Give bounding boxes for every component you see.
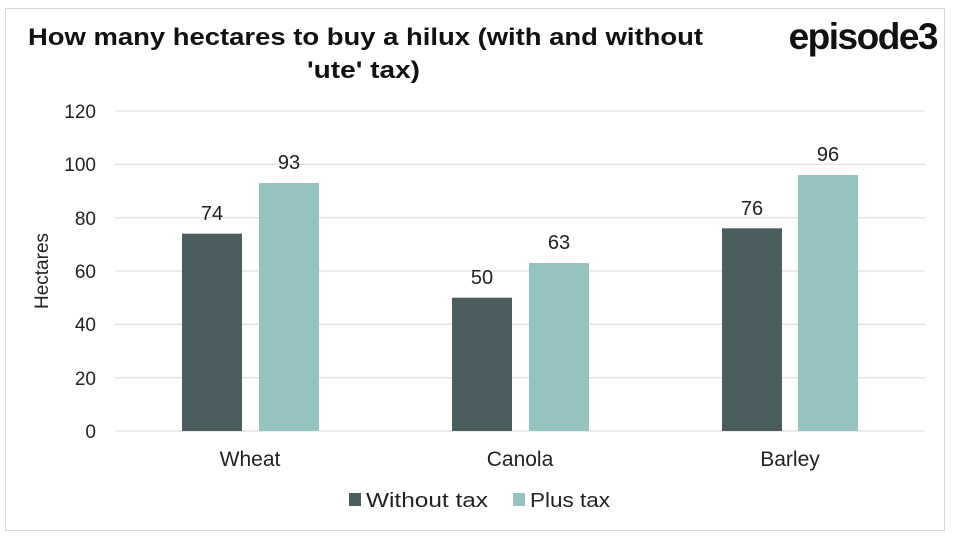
group: Barley: 96: [817, 144, 839, 166]
group: Wheat: 93: [278, 152, 300, 174]
title: 'ute' tax): [307, 57, 420, 84]
y axis labels: 100: [64, 155, 96, 176]
group: Canola: Canola: [487, 448, 554, 471]
legend: Plus tax: [530, 490, 610, 512]
y axis title: Hectares: [32, 233, 53, 309]
title: How many hectares to buy a hilux (with and without: [28, 24, 703, 51]
legend: Without tax: [366, 490, 488, 512]
y axis labels: 20: [75, 369, 96, 390]
bar chart: [182, 144, 858, 471]
legend: [349, 490, 610, 512]
y axis labels: 120: [64, 102, 96, 123]
y axis labels: 0: [85, 422, 96, 443]
y axis labels: 40: [75, 315, 96, 336]
title: [28, 24, 703, 84]
group: Canola: [452, 232, 589, 471]
group: Barley: [722, 144, 858, 471]
group: Barley: 76: [741, 198, 763, 220]
group: Wheat: [182, 152, 319, 471]
group: Wheat: Wheat: [220, 448, 281, 471]
y axis labels: 80: [75, 209, 96, 230]
group: Barley: Barley: [760, 448, 820, 471]
group: Wheat: 74: [201, 203, 223, 225]
y axis labels: 60: [75, 262, 96, 283]
group: Canola: 63: [548, 232, 570, 254]
logo: episode3: episode3: [789, 16, 938, 57]
y axis labels: [64, 102, 96, 443]
group: Canola: 50: [471, 267, 493, 289]
